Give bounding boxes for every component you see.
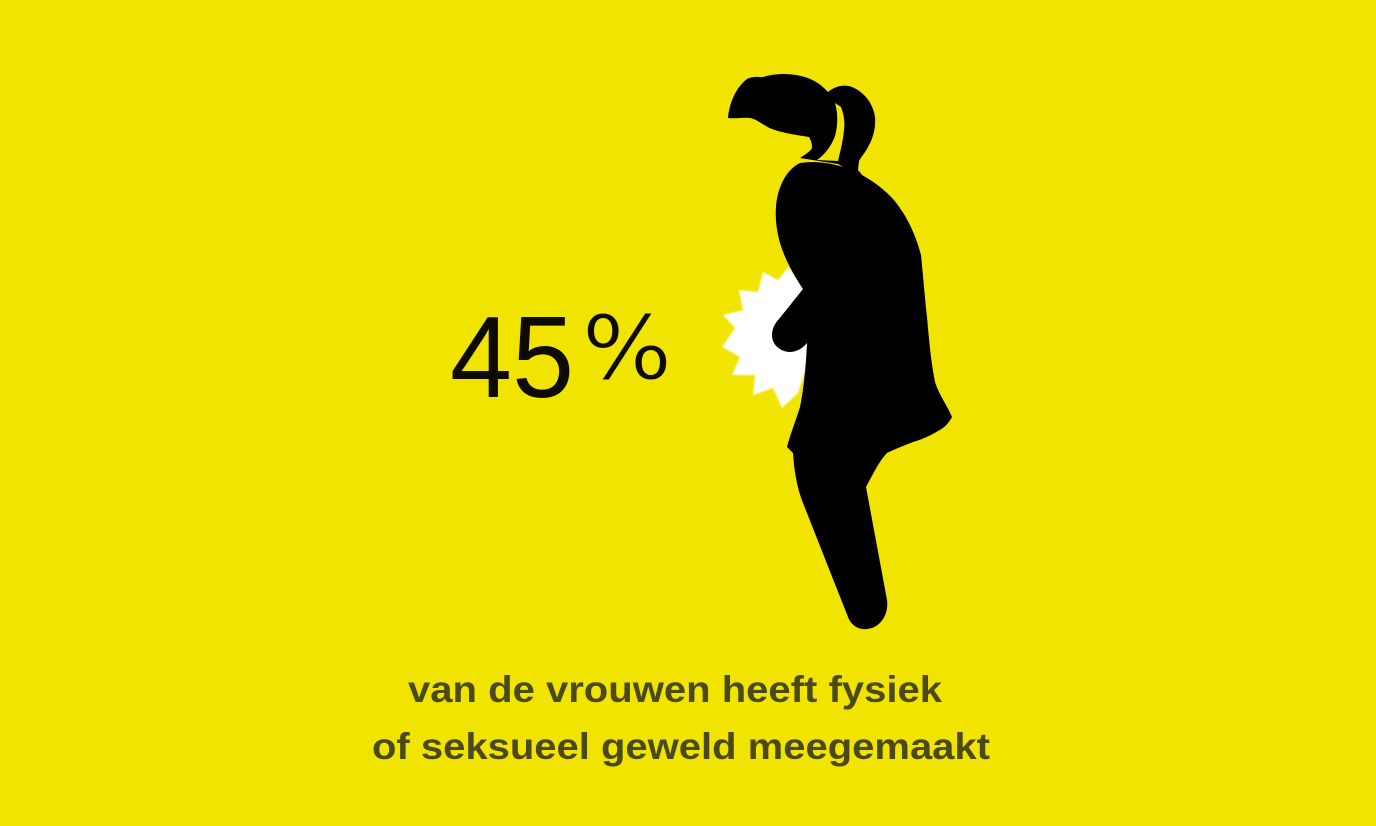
statistic: 45%: % [582,297,672,400]
caption: of seksueel geweld meegemaakt [372,726,990,767]
hair and ponytail [728,74,875,182]
caption: van de vrouwen heeft fysiek [408,669,942,710]
statistic: 45%: 45 [450,292,574,422]
statistic: 45% [450,292,672,422]
icon: woman silhouette holding her abdomen [728,74,952,629]
caption [372,669,990,767]
body, arm and leg [772,162,952,629]
icon: white pain burst [722,267,815,408]
